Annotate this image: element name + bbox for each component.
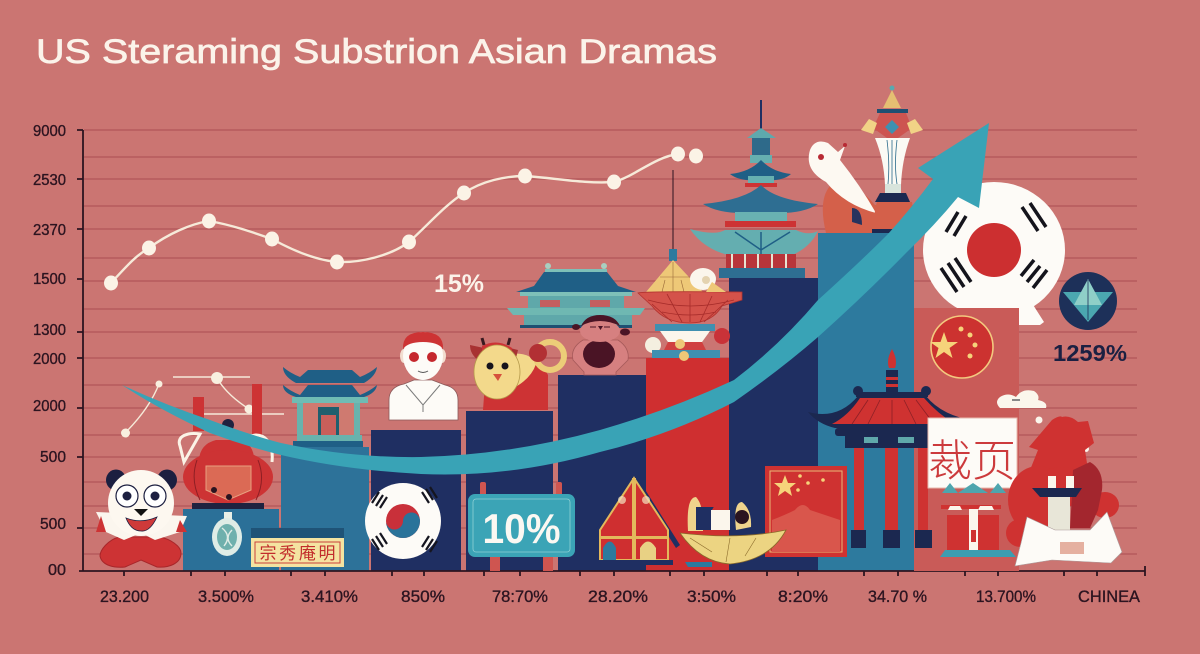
icon: panda	[96, 470, 187, 567]
small line chart	[121, 372, 284, 438]
title: US Steraming Substrion Asian Dramas	[36, 33, 717, 71]
x axis labels: 3.410%	[301, 587, 358, 606]
x axis labels: 34.70 %	[868, 587, 927, 606]
bar: light red	[914, 308, 1019, 571]
bar: navy 3	[558, 375, 646, 571]
x axis labels: 13.700%	[976, 587, 1036, 606]
icon: shrine	[940, 483, 1016, 557]
icon: korean flag speech bubble	[923, 182, 1065, 325]
icon: ornate tower	[861, 86, 923, 233]
line chart	[104, 146, 703, 290]
x axis labels: 78:70%	[492, 587, 548, 606]
y axis labels: 2000	[33, 351, 66, 368]
icon: china flag circle	[930, 316, 993, 378]
sign: 10%: 10%	[482, 505, 560, 552]
y axis labels: 2530	[33, 172, 66, 189]
x axis labels: 23.200	[100, 587, 149, 606]
x axis labels: 850%	[401, 587, 445, 606]
sign: 10%	[468, 482, 575, 571]
x axis labels: 3:50%	[687, 587, 736, 606]
icon: navy emblem	[1059, 272, 1117, 330]
icon: red pot figure	[179, 419, 273, 509]
sign: white calligraphy: 裁页	[928, 437, 1016, 486]
bar: navy 1	[371, 430, 461, 571]
sign: red characters: 宗秀庵明	[260, 544, 336, 563]
bar: navy 4	[729, 278, 818, 571]
bar: blue 2	[281, 447, 369, 571]
icon: pavilion on blue bar	[283, 367, 377, 447]
x axis labels: CHINEA	[1078, 587, 1141, 606]
y axis labels: 1300	[33, 322, 66, 339]
axes	[77, 130, 1145, 576]
bar: navy 2	[466, 411, 553, 571]
icon: china flag panel	[765, 466, 847, 557]
icon: pavilion behind	[507, 263, 645, 328]
x axis labels: 3.500%	[198, 587, 254, 606]
icon: man in white	[389, 332, 458, 420]
icon: lantern pagoda	[638, 170, 742, 361]
icon: red pillars	[193, 384, 262, 440]
icon: boat	[680, 497, 786, 567]
y axis labels: 2000	[33, 398, 66, 415]
y axis labels: 00	[48, 562, 66, 579]
bar: blue 3	[818, 233, 914, 571]
y axis labels: 1500	[33, 271, 66, 288]
y axis labels: 2370	[33, 222, 66, 239]
y axis labels: 9000	[33, 123, 66, 140]
y axis labels: 500	[40, 449, 66, 466]
icon: red figure with paper	[1006, 416, 1122, 566]
icon: tall pagoda	[690, 100, 818, 278]
label: 1259%: 1259%	[1053, 340, 1127, 366]
icon: cloud	[997, 390, 1046, 408]
y axis labels	[33, 123, 66, 579]
bar: red	[646, 358, 729, 571]
icon: red bird	[809, 142, 902, 233]
bar: blue 1	[183, 509, 279, 571]
arrow: growth curve	[122, 123, 989, 475]
sign: red characters	[251, 528, 344, 567]
y axis labels: 500	[40, 516, 66, 533]
sign: white calligraphy	[928, 418, 1017, 488]
icon: korean flag oval	[365, 483, 441, 559]
x axis labels	[100, 587, 1141, 606]
x axis labels: 28.20%	[588, 587, 648, 606]
icon: house	[591, 472, 680, 565]
x axis labels: 8:20%	[778, 587, 828, 606]
icon: bottle	[212, 512, 242, 556]
icon: small creature	[572, 315, 630, 375]
label: 15%: 15%	[434, 270, 484, 298]
icon: gate	[808, 349, 976, 548]
icon: deer creature	[470, 338, 564, 410]
